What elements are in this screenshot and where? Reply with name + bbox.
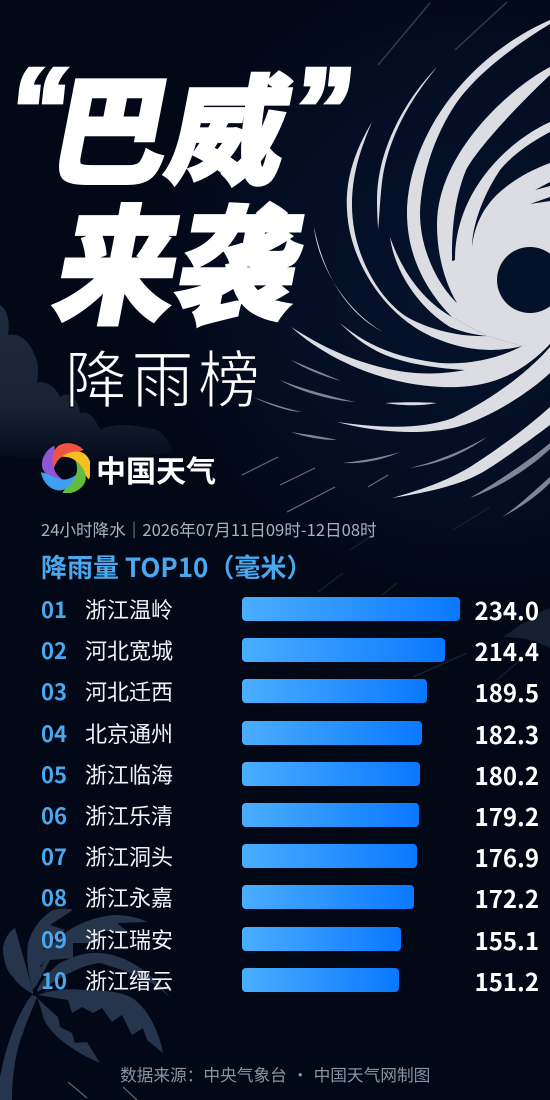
arm e [347, 122, 522, 350]
row 03: 03 [41, 675, 67, 707]
row 09: 浙江瑞安 [85, 923, 173, 955]
title line 1: 巴威 [39, 37, 306, 208]
arm 1 [407, 20, 550, 320]
row 02 [41, 633, 539, 668]
row 01: 234.0 [475, 592, 539, 627]
row 02: 02 [41, 634, 67, 666]
logo text: 中国天气 [96, 447, 216, 491]
closing quote: ” [288, 44, 360, 174]
row 10: 10 [41, 964, 67, 996]
arm 2 [437, 67, 550, 303]
arm f [390, 237, 487, 336]
body [452, 163, 550, 346]
row 06 [41, 798, 539, 833]
band i [337, 347, 550, 432]
date range: 24小时降水｜2026年07月11日09时-12日08时 [41, 517, 377, 541]
typhoon swirl [291, 20, 550, 498]
cloud left [0, 305, 172, 460]
chart heading: 降雨量 TOP10（毫米） [41, 548, 312, 585]
row 08: 172.2 [475, 880, 539, 915]
row 09: 09 [41, 923, 67, 955]
row 10 [41, 963, 539, 998]
title line 2: 来袭 [43, 165, 319, 350]
row 07: 176.9 [475, 839, 539, 874]
icon: colour pinwheel [41, 443, 90, 493]
row 03: 河北迁西 [85, 675, 173, 707]
subtitle: 降雨榜 [65, 330, 265, 420]
arm 3 [455, 122, 550, 262]
row 04 [41, 716, 539, 751]
row 03 [41, 674, 539, 709]
row 01 [41, 592, 539, 627]
row 06: 179.2 [475, 798, 539, 833]
row 07 [41, 839, 539, 874]
thin arcs [377, 67, 437, 230]
row 05: 浙江临海 [85, 758, 173, 790]
palm tree [0, 908, 170, 1100]
row 08 [41, 880, 539, 915]
title [4, 37, 360, 350]
row 04: 北京通州 [85, 717, 173, 749]
row 05 [41, 757, 539, 792]
row 07: 07 [41, 840, 67, 872]
grey swirl lines [253, 360, 550, 517]
logo: 中国天气 [41, 443, 216, 493]
row 03: 189.5 [475, 674, 539, 709]
row 05: 05 [41, 758, 67, 790]
source note: 数据来源：中央气象台 · 中国天气网制图 [120, 1062, 430, 1086]
row 09: 155.1 [475, 922, 539, 957]
row 02: 河北宽城 [85, 634, 173, 666]
row 06: 06 [41, 799, 67, 831]
row 07: 浙江洞头 [85, 840, 173, 872]
row 01: 01 [41, 593, 67, 625]
cloud right [503, 608, 550, 648]
row 10: 151.2 [475, 963, 539, 998]
typhoon eye [497, 182, 550, 313]
opening quote: “ [4, 44, 76, 174]
row 04: 04 [41, 717, 67, 749]
row 10: 浙江缙云 [85, 964, 173, 996]
bar chart [41, 592, 539, 998]
band g and h [291, 323, 550, 387]
row 06: 浙江乐清 [85, 799, 173, 831]
row 04: 182.3 [475, 716, 539, 751]
row 09 [41, 922, 539, 957]
row 08: 08 [41, 881, 67, 913]
band j [392, 407, 550, 498]
row 02: 214.4 [475, 633, 539, 668]
row 08: 浙江永嘉 [85, 881, 173, 913]
row 05: 180.2 [475, 757, 539, 792]
row 01: 浙江温岭 [85, 593, 173, 625]
